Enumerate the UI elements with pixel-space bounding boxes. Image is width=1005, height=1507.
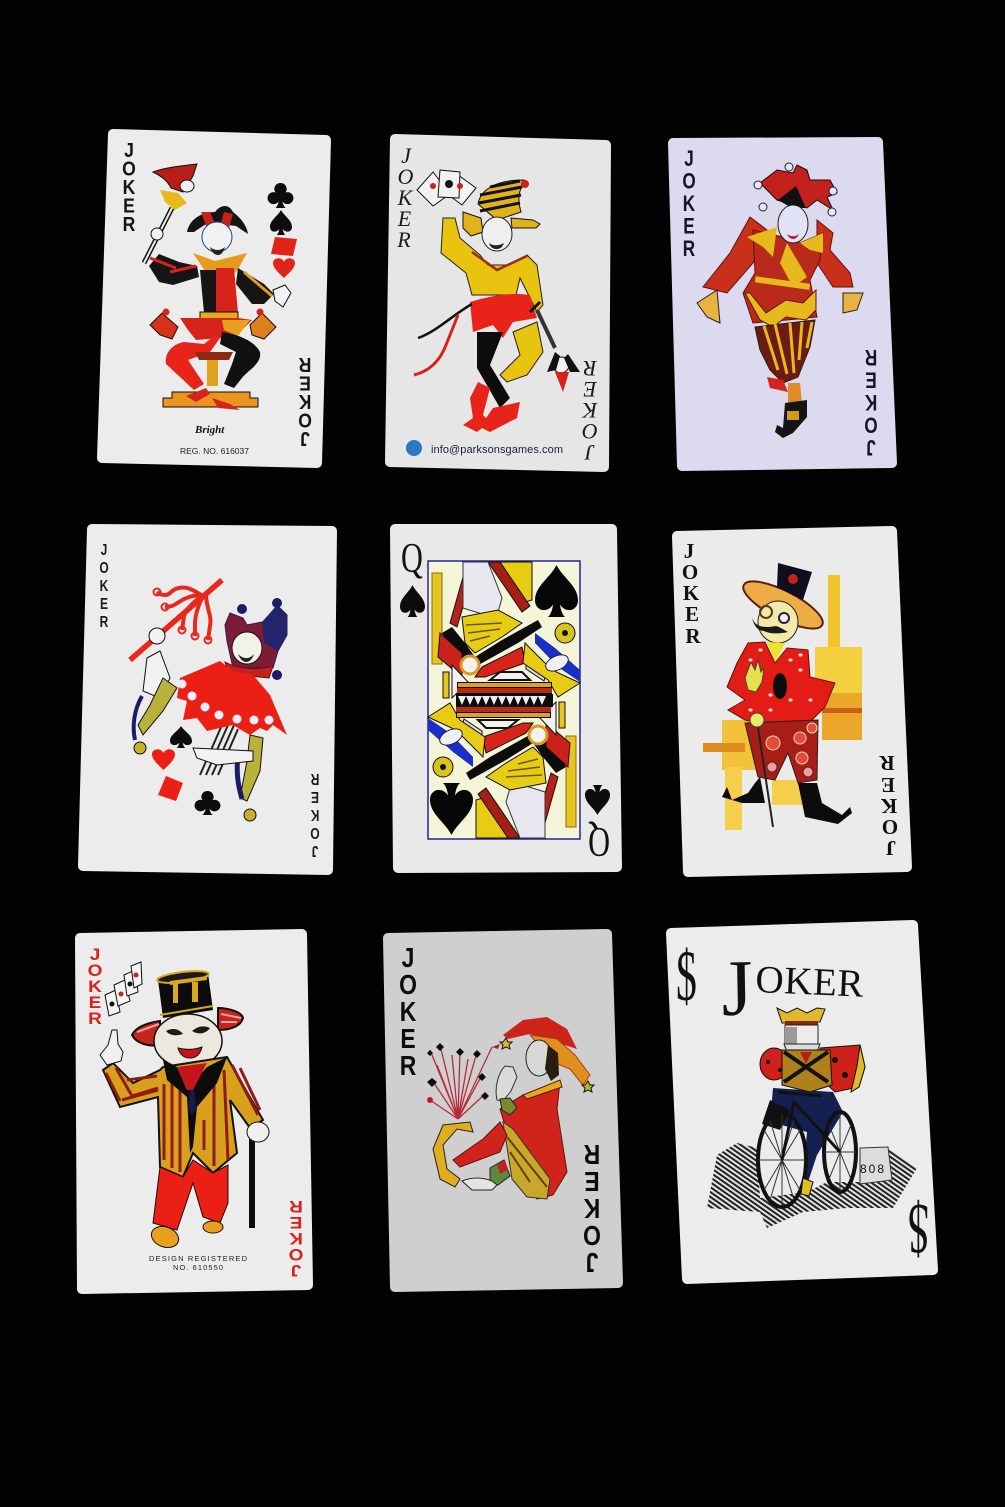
icon: parksons logo <box>405 439 423 457</box>
label: JOKER bottom: JOKER <box>583 1138 601 1277</box>
label: JOKER top: JOKER <box>122 139 136 235</box>
card 6: moustached joker with cane <box>677 531 907 872</box>
card 8: seated joker on grey card <box>388 934 618 1287</box>
label: JOKER top: JOKER <box>88 945 102 1028</box>
label: JOKER top: JOKER <box>99 540 109 630</box>
card 9: Bicycle joker <box>671 925 933 1279</box>
icon: card suits <box>268 183 297 278</box>
icon: fan of cards <box>417 170 476 206</box>
label: JOKER top: JOKER <box>682 147 696 262</box>
card 4: joker with red cape <box>83 529 332 870</box>
figure: seated jester with fountain of suits <box>427 1017 594 1199</box>
yellow background burst <box>703 575 862 830</box>
card 2: Parksons joker <box>390 139 606 467</box>
icon: card suits <box>152 726 220 815</box>
figure: jester with sceptre <box>130 580 287 821</box>
figure: standing jester <box>697 163 863 438</box>
text: registration number: REG. NO. 616037 <box>180 446 249 456</box>
icon: fan of cards <box>105 962 142 1016</box>
label: JOKER bottom: JOKER <box>298 354 312 450</box>
label: JOKER top: JOKER <box>396 143 414 252</box>
figure: king on bicycle: 808 <box>860 1162 884 1176</box>
figure: gentleman joker <box>722 563 852 827</box>
icon: dollar monogram bottom: $ <box>908 1189 929 1269</box>
label: JOKER top: JOKER <box>682 539 701 648</box>
label: JOKER top: JOKER <box>399 943 417 1082</box>
label: JOKER heading <box>721 944 864 1033</box>
text: number: NO. 610550 <box>173 1263 223 1272</box>
label: JOKER bottom: JOKER <box>864 344 878 459</box>
text: Bright: Bright <box>194 424 225 436</box>
label: JOKER heading: OKER <box>755 958 864 1006</box>
court frame and figure <box>428 561 580 839</box>
card 5: queen of spades <box>395 529 617 868</box>
card 7: top-hat joker <box>80 934 308 1289</box>
label: JOKER heading: J <box>721 944 753 1033</box>
card 3: classic jester on lilac card <box>673 142 892 466</box>
label: JOKER bottom: JOKER <box>581 356 598 465</box>
label: JOKER bottom: JOKER <box>310 771 320 861</box>
figure: gentleman in striped suit <box>100 969 269 1251</box>
text: design registered: DESIGN REGISTERED <box>149 1254 248 1263</box>
text: email: info@parksonsgames.com <box>431 444 563 456</box>
label: Q bottom: Q <box>588 819 610 866</box>
icon: spade bottom <box>585 785 610 815</box>
icon: dollar monogram top: $ <box>676 936 697 1016</box>
label: Q top: Q <box>401 534 423 581</box>
figure: dancing jester <box>414 180 580 432</box>
figure: jester <box>144 164 291 410</box>
icon: spade top <box>400 585 425 617</box>
label: JOKER bottom: JOKER <box>879 751 898 860</box>
card 1: Bright joker with sceptre <box>102 134 326 463</box>
figure: king on bicycle <box>707 1008 917 1228</box>
label: JOKER bottom: JOKER <box>289 1197 303 1280</box>
